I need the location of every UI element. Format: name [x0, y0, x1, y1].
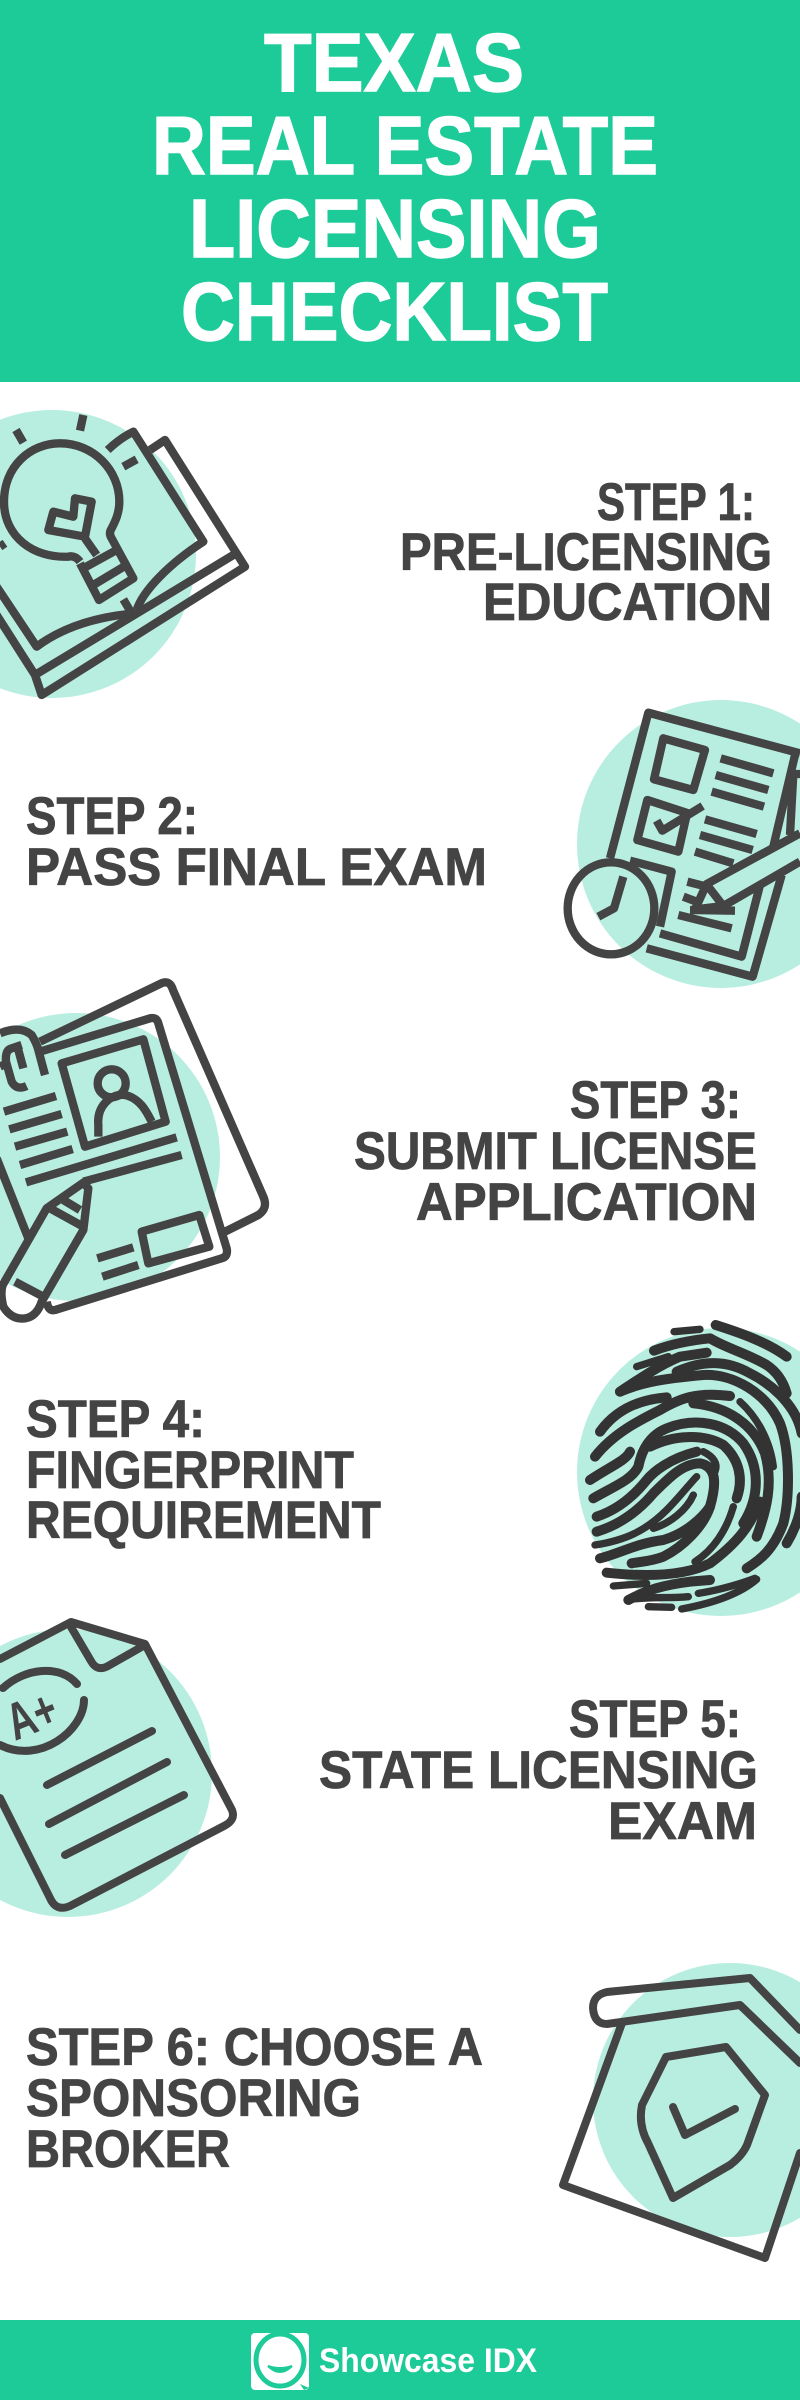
header banner [0, 0, 800, 382]
step 6 text: SPONSORING [26, 2069, 361, 2128]
panel: step 6 [26, 1963, 800, 2258]
step 4 text: FINGERPRINT [26, 1441, 354, 1500]
icon: document with shield [563, 1963, 800, 2258]
step 1 text: EDUCATION [483, 573, 772, 632]
icon: checklist with clock and pencil [568, 700, 800, 988]
step 4 text: STEP 4: [26, 1390, 205, 1449]
icon: fingerprint [577, 1325, 800, 1616]
step 3 text: APPLICATION [416, 1173, 757, 1232]
step 6 text: BROKER [26, 2120, 230, 2179]
step 4 text: REQUIREMENT [26, 1491, 381, 1550]
step 3 text [354, 1071, 757, 1232]
panel: step 3 [0, 982, 757, 1319]
step 2 text: PASS FINAL EXAM [26, 838, 487, 897]
step 4 text [26, 1390, 381, 1550]
icon: application form with photo, paperclip and pencil [0, 982, 265, 1319]
icon: Showcase IDX logo [251, 2333, 309, 2390]
panel: step 4 [26, 1325, 800, 1616]
step 5 text: EXAM [608, 1792, 757, 1851]
panel: step 5 [0, 1622, 758, 1917]
icon text: A+: A+ [0, 1680, 66, 1752]
title: LICENSING [189, 182, 601, 275]
icon: graded paper A+ [0, 1622, 233, 1917]
title: CHECKLIST [181, 265, 608, 358]
panel: step 2 [26, 700, 800, 988]
panel: step 1 [0, 410, 772, 698]
step 5 text [319, 1690, 758, 1851]
step 6 text [26, 2018, 483, 2179]
title: REAL ESTATE [152, 99, 658, 192]
title [152, 16, 658, 358]
brand name: Showcase IDX [319, 2342, 537, 2380]
step 2 text [26, 787, 487, 897]
title: TEXAS [264, 16, 524, 109]
step 1 text: STEP 1: [597, 473, 755, 532]
step 1 text [400, 473, 772, 632]
step 5 text: STEP 5: [569, 1690, 741, 1749]
step 2 text: STEP 2: [26, 787, 198, 846]
step 3 text: SUBMIT LICENSE [354, 1122, 757, 1181]
step 3 text: STEP 3: [570, 1071, 741, 1130]
step 5 text: STATE LICENSING [319, 1741, 758, 1800]
icon: book with light bulb [0, 410, 245, 698]
step 6 text: STEP 6: CHOOSE A [26, 2018, 483, 2077]
footer bar [0, 2320, 800, 2400]
